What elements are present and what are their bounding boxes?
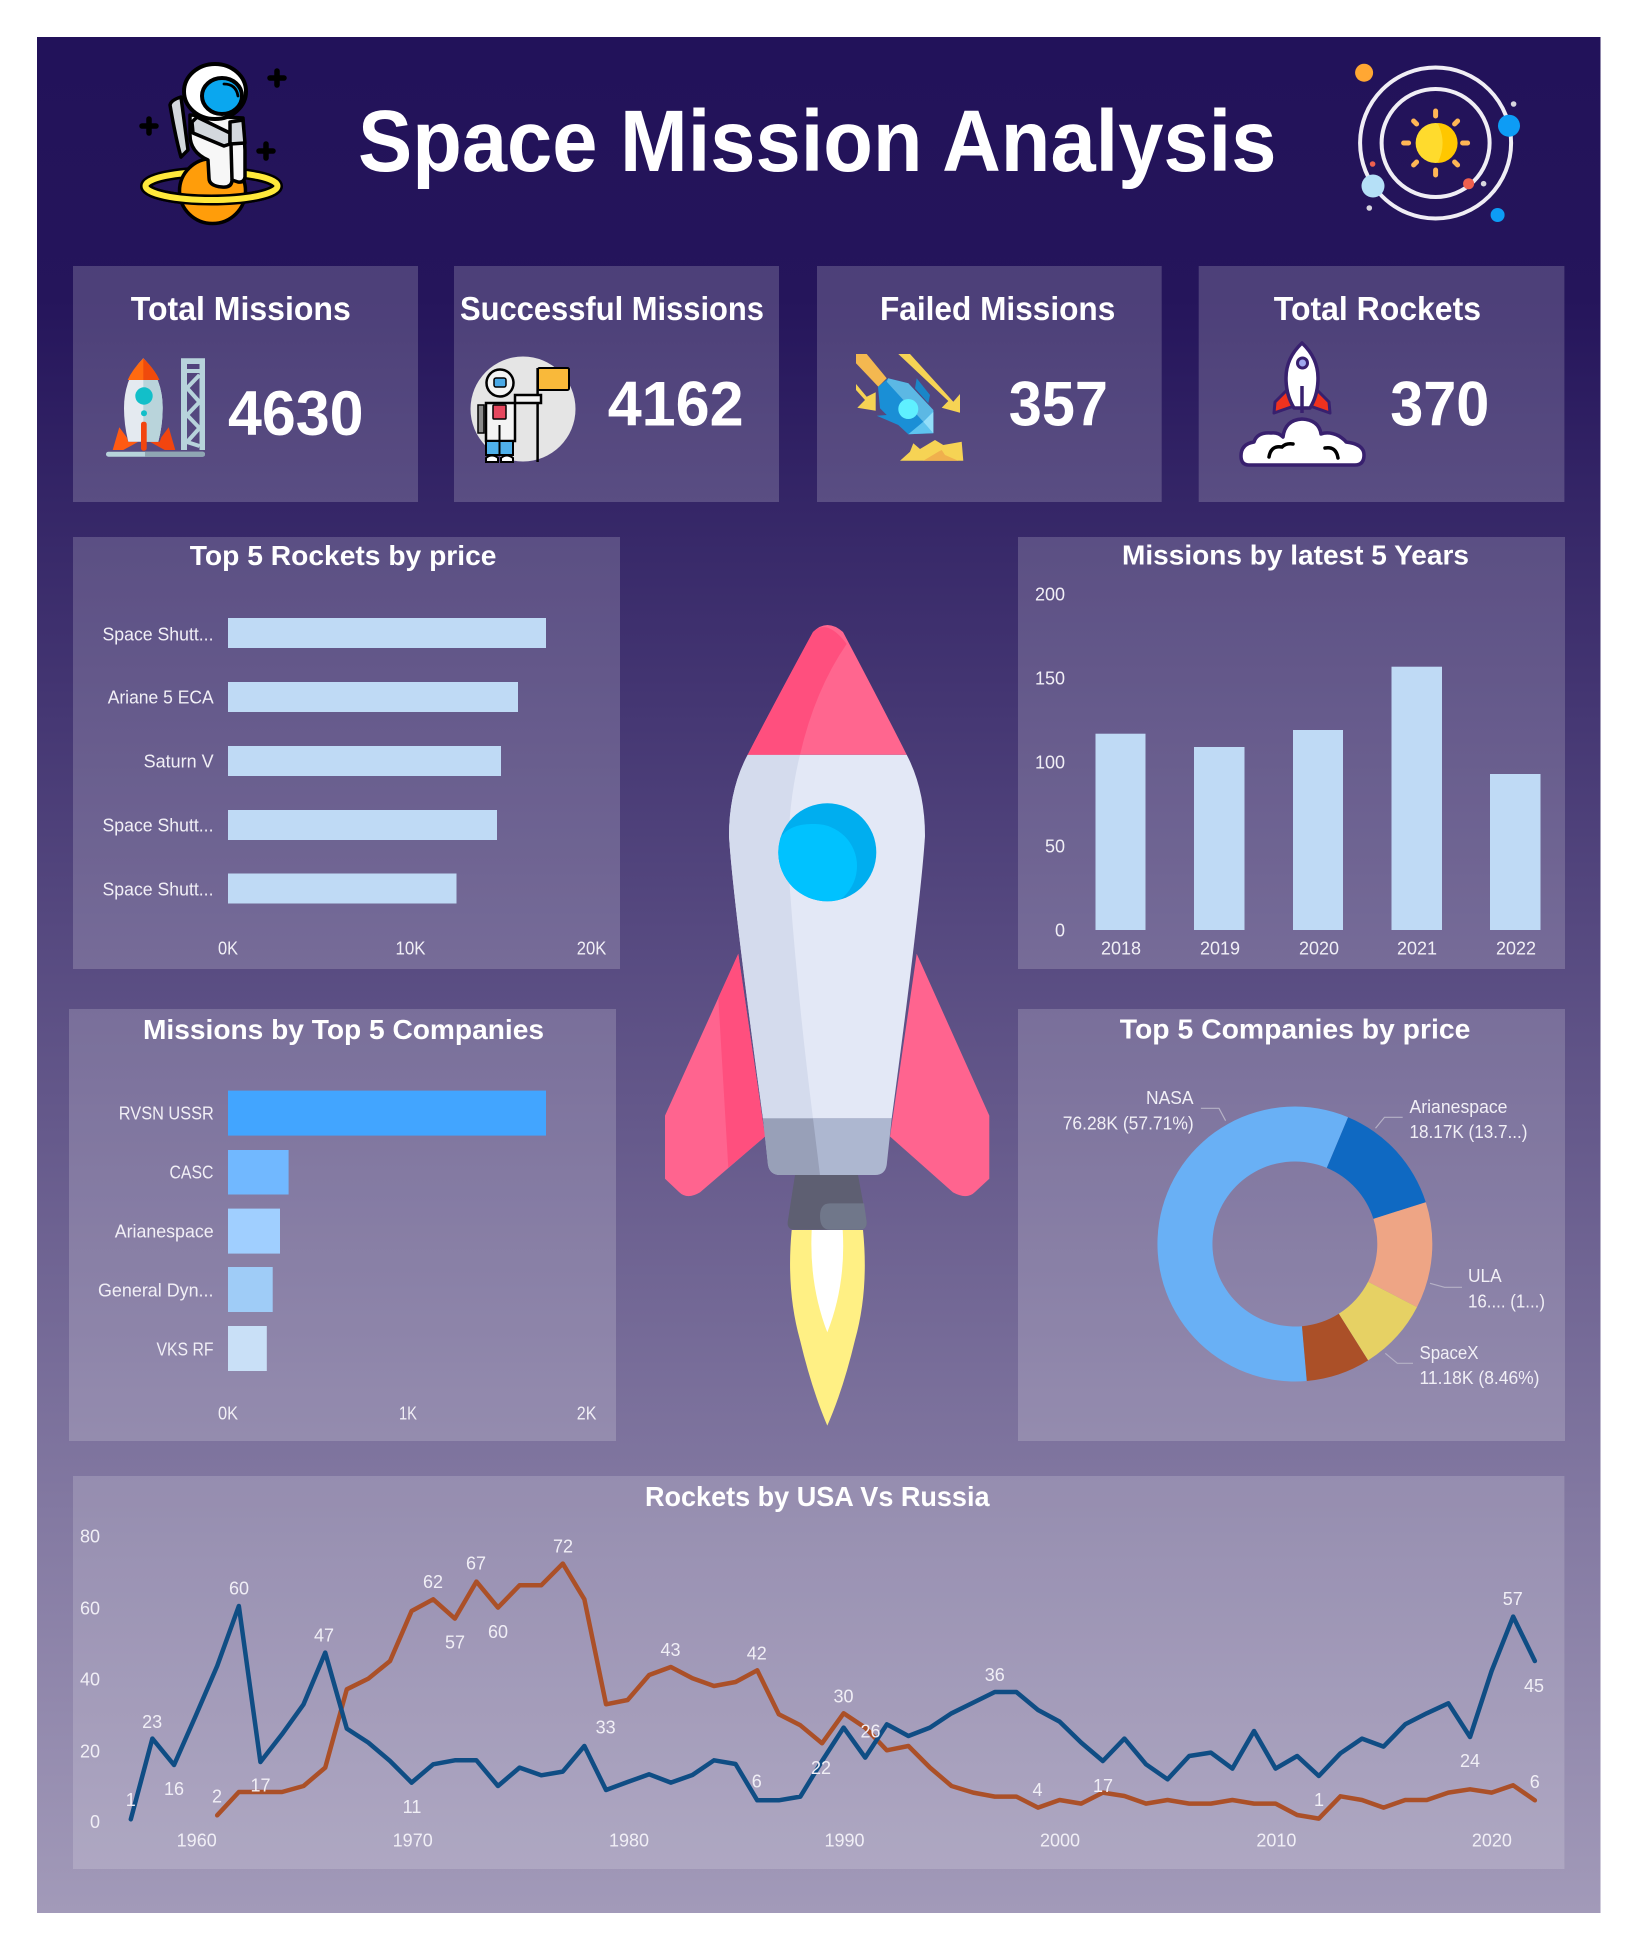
bar chart: companies xyxy=(98,1091,596,1424)
bar chart: rockets xyxy=(102,618,606,958)
data labels: 30 xyxy=(833,1686,854,1706)
data labels: 33 xyxy=(596,1718,616,1738)
data labels: 17 xyxy=(1093,1776,1113,1796)
y axis labels: 40 xyxy=(80,1670,100,1690)
donut label: NASA: 76.28K (57.71%) xyxy=(1063,1114,1194,1134)
bar chart: rockets: Space Shutt... xyxy=(102,880,214,900)
data labels xyxy=(126,1536,1544,1817)
x axis labels: 2010 xyxy=(1256,1830,1296,1850)
heading: failed missions: Failed Missions xyxy=(880,290,1115,327)
nozzle xyxy=(788,1175,867,1230)
porthole xyxy=(778,803,876,902)
value: total missions: 4630 xyxy=(228,379,364,449)
bar chart: companies: VKS RF xyxy=(156,1340,214,1360)
x axis labels: 1990 xyxy=(824,1830,865,1850)
data labels: 47 xyxy=(314,1626,334,1646)
panel: top 5 companies by price xyxy=(1018,1009,1565,1441)
bar chart: years: 100 xyxy=(1035,752,1065,772)
heading: missions by top 5 companies: Missions by Top 5 Companies xyxy=(143,1014,544,1045)
right fin xyxy=(890,954,989,1196)
illustration: central rocket xyxy=(665,625,989,1426)
donut label: ULA: ULA xyxy=(1468,1266,1502,1286)
icon: solar system xyxy=(1355,64,1520,222)
icon: astronaut on planet xyxy=(142,64,284,224)
data labels: 11 xyxy=(403,1797,421,1817)
donut label: SpaceX: 11.18K (8.46%) xyxy=(1420,1368,1540,1388)
data labels: 42 xyxy=(747,1644,767,1664)
panel: total missions xyxy=(73,266,418,502)
data labels: 24 xyxy=(1460,1751,1480,1771)
bar chart: years: 2018 xyxy=(1101,938,1141,958)
data labels: 62 xyxy=(423,1572,443,1592)
heading: missions by latest 5 years: Missions by latest 5 Years xyxy=(1122,539,1469,570)
data labels: 67 xyxy=(466,1554,486,1574)
data labels: 45 xyxy=(1524,1676,1544,1696)
donut label: SpaceX: SpaceX xyxy=(1420,1343,1478,1363)
heading: total missions: Total Missions xyxy=(131,290,351,327)
panel: top 5 rockets by price xyxy=(73,537,620,969)
bar chart: rockets: Saturn V xyxy=(144,752,214,772)
y axis labels xyxy=(80,1526,100,1832)
bar chart: companies: Arianespace xyxy=(115,1222,214,1242)
bar chart: years: 2021 xyxy=(1397,938,1437,958)
data labels: 72 xyxy=(553,1536,573,1556)
bar chart: years: 2019 xyxy=(1200,938,1240,958)
bar chart: years: 50 xyxy=(1045,836,1065,856)
data labels: 43 xyxy=(660,1640,681,1660)
y axis labels: 80 xyxy=(80,1526,100,1546)
panel: failed missions xyxy=(817,266,1162,502)
bar chart: rockets: Space Shutt... xyxy=(102,816,214,836)
x axis labels: 1980 xyxy=(609,1830,649,1850)
nose cone xyxy=(748,625,907,755)
icon: rocket on launch pad xyxy=(106,358,205,457)
donut label: Arianespace xyxy=(1410,1097,1528,1142)
icon: falling comet xyxy=(856,354,963,461)
bar chart: years: 2020 xyxy=(1299,938,1339,958)
data labels: 1 xyxy=(126,1790,136,1810)
y axis labels: 60 xyxy=(80,1598,100,1618)
bar chart: years: 2022 xyxy=(1496,938,1536,958)
bar chart: companies: RVSN USSR xyxy=(119,1104,214,1124)
heading: rockets by USA vs Russia: Rockets by USA Vs Russia xyxy=(645,1481,990,1512)
data labels: 16 xyxy=(164,1779,184,1799)
bar chart: years xyxy=(1035,584,1540,958)
bar chart: rockets: 10K xyxy=(396,938,426,958)
x axis labels: 2000 xyxy=(1040,1830,1080,1850)
panel: rockets by USA vs Russia xyxy=(73,1476,1564,1869)
heading: top 5 rockets by price: Top 5 Rockets by price xyxy=(190,540,497,571)
bar chart: companies: 1K xyxy=(399,1404,417,1424)
x axis labels: 2020 xyxy=(1472,1830,1512,1850)
line: usa xyxy=(131,1606,1535,1819)
panel: successful missions xyxy=(454,266,779,502)
bar chart: rockets: 20K xyxy=(577,938,606,958)
bar chart: rockets: Ariane 5 ECA xyxy=(108,688,214,708)
bar chart: companies: 2K xyxy=(577,1404,596,1424)
data labels: 6 xyxy=(1530,1772,1540,1792)
line: russia xyxy=(217,1564,1535,1819)
icon: astronaut with flag xyxy=(470,356,576,462)
bar chart: years: 150 xyxy=(1035,668,1065,688)
donut label: NASA xyxy=(1063,1088,1194,1134)
data labels: 6 xyxy=(752,1772,762,1792)
bar chart: companies: General Dyn... xyxy=(98,1280,214,1300)
donut label: Arianespace: Arianespace xyxy=(1410,1097,1508,1117)
panel: missions by latest 5 years xyxy=(1018,537,1565,969)
bar chart: rockets: Space Shutt... xyxy=(102,624,214,644)
data labels: 60 xyxy=(488,1622,508,1642)
bar chart: years: 0 xyxy=(1055,920,1065,940)
donut label: ULA xyxy=(1468,1266,1545,1312)
data labels: 17 xyxy=(250,1776,271,1796)
flame xyxy=(790,1230,865,1426)
heading: top 5 companies by price: Top 5 Companies by price xyxy=(1120,1013,1470,1044)
panel: missions by top 5 companies xyxy=(69,1009,616,1441)
bar chart: rockets: 0K xyxy=(218,938,238,958)
donut label: SpaceX xyxy=(1420,1343,1540,1388)
heading: successful missions: Successful Missions xyxy=(460,290,764,327)
data labels: 2 xyxy=(212,1786,222,1806)
x axis labels: 1970 xyxy=(393,1830,433,1850)
data labels: 23 xyxy=(142,1712,162,1732)
panel: total rockets xyxy=(1199,266,1564,502)
bar chart: companies: CASC xyxy=(170,1162,214,1182)
donut label: Arianespace: 18.17K (13.7...) xyxy=(1410,1122,1528,1142)
x axis labels xyxy=(177,1830,1512,1850)
rocket body xyxy=(729,755,925,1118)
data labels: 57 xyxy=(1503,1589,1523,1609)
bar chart: companies: 0K xyxy=(218,1404,238,1424)
data labels: 60 xyxy=(229,1578,249,1598)
data labels: 1 xyxy=(1314,1790,1324,1810)
value: failed missions: 357 xyxy=(1009,369,1108,439)
value: successful missions: 4162 xyxy=(608,369,744,439)
icon: rocket launching from cloud xyxy=(1241,343,1364,465)
donut chart xyxy=(1157,1107,1432,1382)
donut leader lines xyxy=(1201,1108,1462,1363)
y axis labels: 0 xyxy=(90,1812,100,1832)
data labels: 4 xyxy=(1032,1780,1043,1800)
left fin xyxy=(665,954,765,1196)
donut label: NASA: NASA xyxy=(1146,1088,1194,1108)
data labels: 36 xyxy=(985,1665,1005,1685)
title: Space Mission Analysis xyxy=(358,93,1276,190)
data labels: 26 xyxy=(860,1722,881,1742)
engine band xyxy=(763,1118,892,1175)
data labels: 22 xyxy=(811,1758,831,1778)
data labels: 57 xyxy=(445,1632,465,1652)
y axis labels: 20 xyxy=(80,1742,100,1762)
donut label: ULA: 16.... (1...) xyxy=(1468,1292,1545,1312)
bar chart: years: 200 xyxy=(1035,584,1065,604)
heading: total rockets: Total Rockets xyxy=(1274,290,1481,327)
line chart xyxy=(80,1526,1544,1850)
x axis labels: 1960 xyxy=(177,1830,217,1850)
value: total rockets: 370 xyxy=(1390,369,1489,439)
